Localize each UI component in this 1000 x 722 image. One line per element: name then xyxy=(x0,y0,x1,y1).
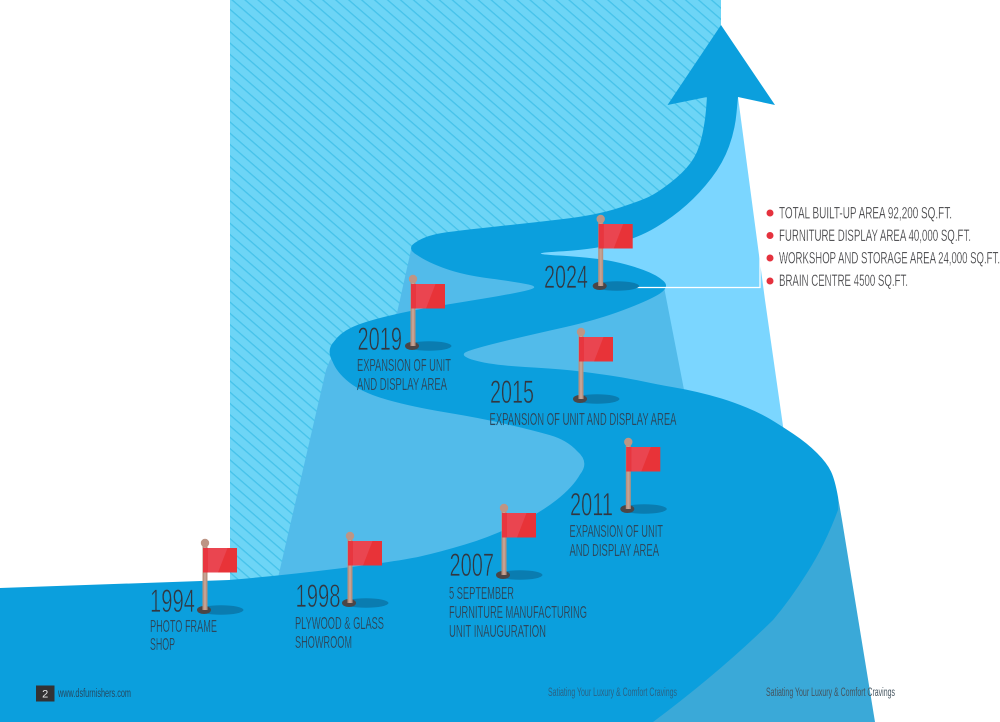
flag 2019 xyxy=(405,275,452,351)
description 2019: AND DISPLAY AREA xyxy=(357,374,447,394)
description 1994 xyxy=(150,616,217,654)
description 2011: EXPANSION OF UNIT xyxy=(570,521,663,541)
flag 1994 xyxy=(197,539,244,615)
description 2015: EXPANSION OF UNIT AND DISPLAY AREA xyxy=(490,409,677,429)
page number badge xyxy=(36,686,54,702)
tagline left: Satiating Your Luxury & Comfort Cravings xyxy=(548,687,677,699)
year 2007: 2007 xyxy=(450,547,494,583)
year 2011: 2011 xyxy=(570,486,613,522)
description 1994: PHOTO FRAME xyxy=(150,616,217,636)
area list xyxy=(766,204,1000,290)
page number badge: 2 xyxy=(42,688,48,700)
flag 2007 xyxy=(496,504,542,580)
description 1998: PLYWOOD & GLASS xyxy=(295,613,384,633)
milestone 1994 xyxy=(150,539,244,654)
description 2011 xyxy=(570,521,663,560)
year 2015: 2015 xyxy=(490,374,534,410)
callout connector line xyxy=(621,202,760,288)
milestone 2007 xyxy=(449,504,587,641)
flag 2024 xyxy=(593,215,639,291)
bullet: brain centre xyxy=(766,272,908,290)
description 1994: SHOP xyxy=(150,634,175,654)
description 2019 xyxy=(357,355,451,394)
description 1998 xyxy=(295,613,384,652)
description 2007: UNIT INAUGURATION xyxy=(449,621,546,641)
description 2007: FURNITURE MANUFACTURING xyxy=(449,602,587,622)
year 2024: 2024 xyxy=(544,259,588,295)
description 1998: SHOWROOM xyxy=(295,632,352,652)
medium blue beam xyxy=(277,250,686,600)
year 1994: 1994 xyxy=(150,583,195,619)
bullet: brain centre: BRAIN CENTRE 4500 SQ.FT. xyxy=(779,272,908,290)
road shadow corner xyxy=(640,497,875,722)
milestone 2024 xyxy=(544,215,639,295)
milestone 2015 xyxy=(490,328,677,429)
website: www.dsfurnishers.com xyxy=(57,688,131,700)
description 2019: EXPANSION OF UNIT xyxy=(357,355,451,375)
milestone 2019 xyxy=(357,275,452,394)
flag 1998 xyxy=(342,532,388,608)
hatched background panel xyxy=(230,0,721,585)
description 2007 xyxy=(449,583,587,641)
description 2011: AND DISPLAY AREA xyxy=(570,540,659,560)
tagline right: Satiating Your Luxury & Comfort Cravings xyxy=(766,687,895,699)
milestone 1998 xyxy=(295,532,388,652)
year 1998: 1998 xyxy=(296,578,340,614)
milestone 2011 xyxy=(570,438,667,560)
flag 2015 xyxy=(573,328,620,404)
light beam behind the road xyxy=(535,97,785,440)
description 2007: 5 SEPTEMBER xyxy=(449,583,514,603)
flag 2011 xyxy=(620,438,667,514)
year 2019: 2019 xyxy=(358,321,402,357)
